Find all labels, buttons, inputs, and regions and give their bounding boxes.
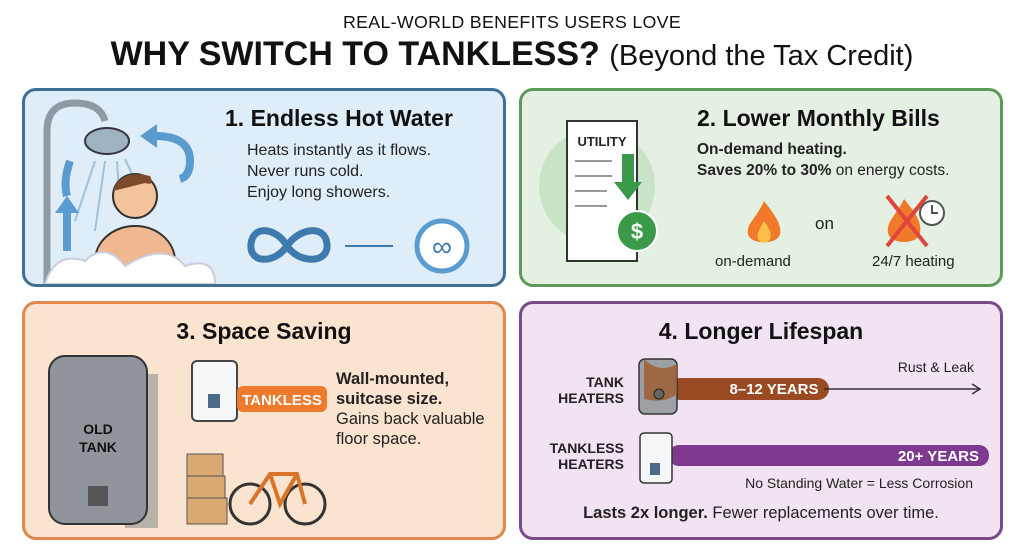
text block: suitcase size. <box>336 390 442 408</box>
text block: floor space. <box>336 430 421 448</box>
bar: tank 8-12 years: Rust & Leak <box>898 359 975 375</box>
text: no standing water: No Standing Water = Less Corrosion <box>745 475 973 491</box>
heading: 1. Endless Hot Water <box>225 105 453 131</box>
label tankless heaters: HEATERS <box>558 456 624 472</box>
label tankless heaters <box>550 440 624 472</box>
text block <box>697 141 949 179</box>
panel: lower monthly bills <box>519 88 1003 287</box>
icon: tankless unit with label <box>191 360 327 422</box>
icon: old tank <box>48 355 158 528</box>
bar: tankless 20+ years: 20+ YEARS <box>898 448 979 465</box>
text block <box>336 370 485 448</box>
label tank heaters <box>558 374 624 406</box>
icon: utility bill: $ <box>631 219 643 244</box>
icon: flame on-demand <box>748 201 780 243</box>
icon: boxes and bike <box>186 454 326 526</box>
icon: old tank: TANK <box>79 439 117 455</box>
bottom text: Lasts 2x longer. Fewer replacements over time. <box>583 504 939 522</box>
text block: Enjoy long showers. <box>247 184 390 201</box>
label on: on <box>815 214 834 233</box>
panel: lower monthly bills: 24/7 heating <box>872 253 955 270</box>
label tank heaters: TANK <box>586 374 624 390</box>
text block: On-demand heating. <box>697 141 847 158</box>
bar: tank 8-12 years: 8–12 YEARS <box>730 381 818 398</box>
heading: 4. Longer Lifespan <box>659 318 863 344</box>
title: WHY SWITCH TO TANKLESS? (Beyond the Tax Credit) <box>111 35 913 73</box>
label tankless heaters: TANKLESS <box>550 440 624 456</box>
label tank heaters: HEATERS <box>558 390 624 406</box>
text block: Heats instantly as it flows. <box>247 142 431 159</box>
text block: Wall-mounted, <box>336 370 449 388</box>
icon: tankless unit with label: TANKLESS <box>242 392 322 409</box>
illustration: shower <box>44 100 216 284</box>
icon: utility bill: UTILITY <box>577 134 627 149</box>
icon: old tank: OLD <box>83 421 113 437</box>
panel: endless hot water <box>22 88 506 287</box>
icon: utility bill <box>539 120 658 262</box>
bar: tankless 20+ years <box>639 432 989 484</box>
text block <box>247 142 431 201</box>
icon: infinity clock: ∞ <box>432 231 452 262</box>
text block: Gains back valuable <box>336 410 485 428</box>
text block: Saves 20% to 30% on energy costs. <box>697 162 949 179</box>
panel: longer lifespan <box>519 301 1003 540</box>
labels: on-demand <box>715 253 791 270</box>
icon: infinity clock <box>247 218 470 274</box>
subtitle: REAL-WORLD BENEFITS USERS LOVE <box>343 12 681 32</box>
text block: Never runs cold. <box>247 163 364 180</box>
panel: space saving <box>22 301 506 540</box>
heading: 3. Space Saving <box>176 318 352 344</box>
bar: tank 8-12 years <box>638 358 982 415</box>
heading: 2. Lower Monthly Bills <box>697 105 940 131</box>
icon: crossed flame with clock <box>886 194 945 248</box>
